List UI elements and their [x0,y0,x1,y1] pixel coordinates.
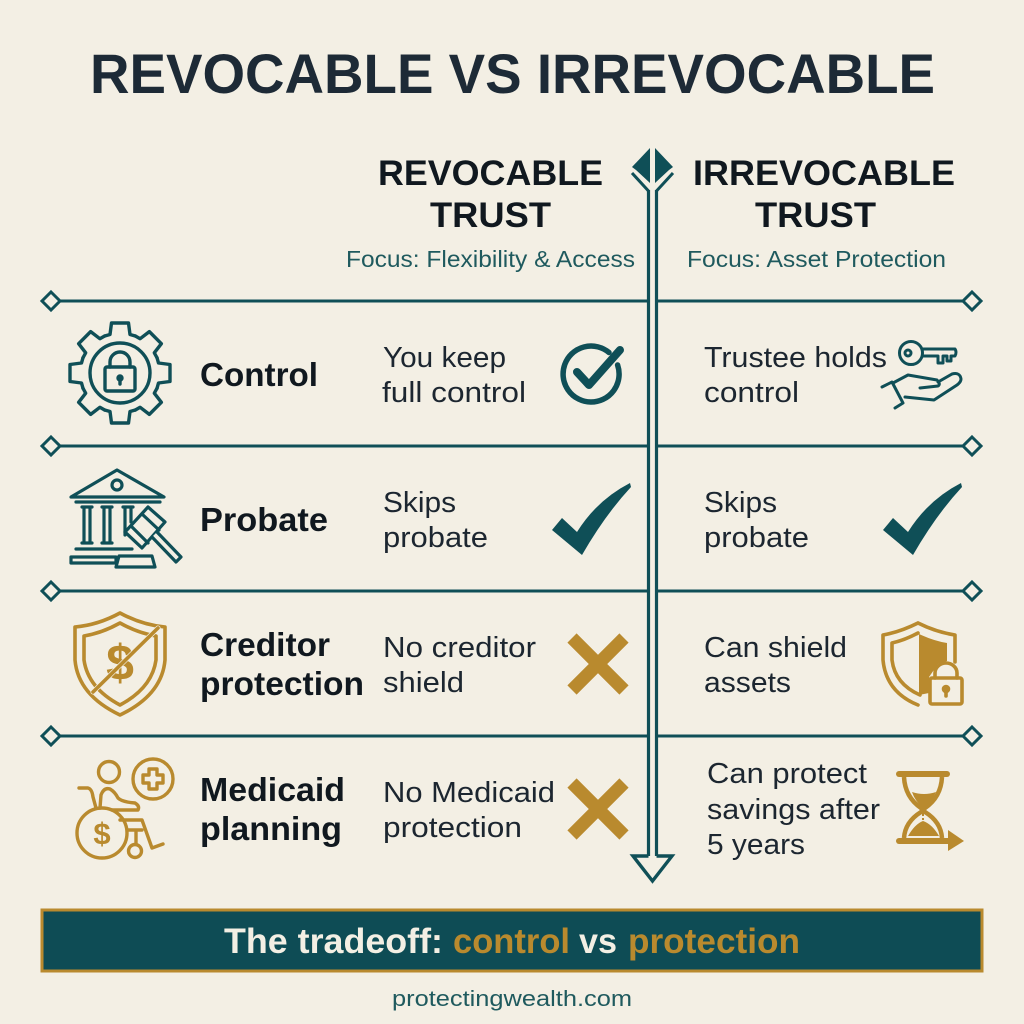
icon: hourglass with arrow [899,774,964,851]
revocable cell: probate [383,487,488,554]
revocable cell: control [382,342,526,409]
icon: wheelchair with dollar wheel and medical cross: $ [93,816,111,851]
revocable cell: control: full control [382,377,526,409]
central divider arrow [632,148,673,881]
row label: medicaid planning: Medicaid [200,771,345,808]
banner: the tradeoff: control [453,922,570,961]
banner: the tradeoff: The tradeoff: [224,922,443,961]
revocable cell: creditor: shield [383,667,464,699]
column heading: irrevocable trust: Focus: Asset Protection [687,246,946,272]
icon: key over open hand [882,342,961,408]
irrevocable cell: creditor [704,632,847,699]
banner: the tradeoff: protection [628,922,800,961]
row: creditor protection [75,613,962,715]
irrevocable cell: creditor: Can shield [704,632,847,664]
icon: crossed-out dollar shield [75,613,165,715]
icon: gear with padlock [70,323,170,423]
irrevocable cell: medicaid: Can protect [707,758,867,790]
column heading: revocable trust [346,154,635,272]
irrevocable cell: control [704,342,887,409]
banner: the tradeoff [42,910,982,971]
icon: crossed-out dollar shield: $ [106,635,134,691]
icon: large check [552,483,631,555]
row label: probate: Probate [200,501,328,538]
irrevocable cell: control: Trustee holds [704,342,887,374]
row: medicaid planning [77,758,964,861]
row label: medicaid planning [200,771,345,847]
icon: circled check [563,346,620,402]
row label: medicaid planning: planning [200,810,342,847]
revocable cell: probate: Skips [383,487,456,519]
revocable cell: creditor [383,632,536,699]
column heading: revocable trust: REVOCABLE [378,154,603,193]
icon: half shield with padlock [883,623,962,705]
irrevocable cell: medicaid: savings after [707,794,880,826]
irrevocable cell: probate: Skips [704,487,777,519]
row: control [70,323,961,423]
revocable cell: medicaid: No Medicaid [383,777,555,809]
irrevocable cell: medicaid [707,758,880,861]
icon: gold cross [572,638,624,690]
irrevocable cell: creditor: assets [704,667,791,699]
banner: the tradeoff: vs [579,922,617,961]
column heading: irrevocable trust [687,154,955,272]
revocable cell: creditor: No creditor [383,632,536,664]
title: REVOCABLE VS IRREVOCABLE [90,42,935,105]
icon: courthouse with gavel [71,470,181,567]
row label: creditor protection [200,626,364,702]
column heading: revocable trust: TRUST [430,196,551,235]
revocable cell: control: You keep [383,342,506,374]
irrevocable cell: medicaid: 5 years [707,829,805,861]
row label: control: Control [200,356,318,393]
irrevocable cell: probate [704,487,809,554]
row label: creditor protection: protection [200,665,364,702]
column heading: irrevocable trust: TRUST [755,196,876,235]
row divider lines with diamonds [42,292,981,745]
column heading: irrevocable trust: IRREVOCABLE [693,154,955,193]
icon: large check [883,483,962,555]
irrevocable cell: control: control [704,377,799,409]
row: probate [71,470,962,567]
row label: creditor protection: Creditor [200,626,330,663]
revocable cell: medicaid [383,777,555,844]
column heading: revocable trust: Focus: Flexibility & Access [346,246,635,272]
icon: wheelchair with dollar wheel and medical cross [77,759,173,858]
icon: gold cross [572,783,624,835]
footer url: protectingwealth.com [392,986,632,1011]
irrevocable cell: probate: probate [704,522,809,554]
revocable cell: medicaid: protection [383,812,522,844]
revocable cell: probate: probate [383,522,488,554]
